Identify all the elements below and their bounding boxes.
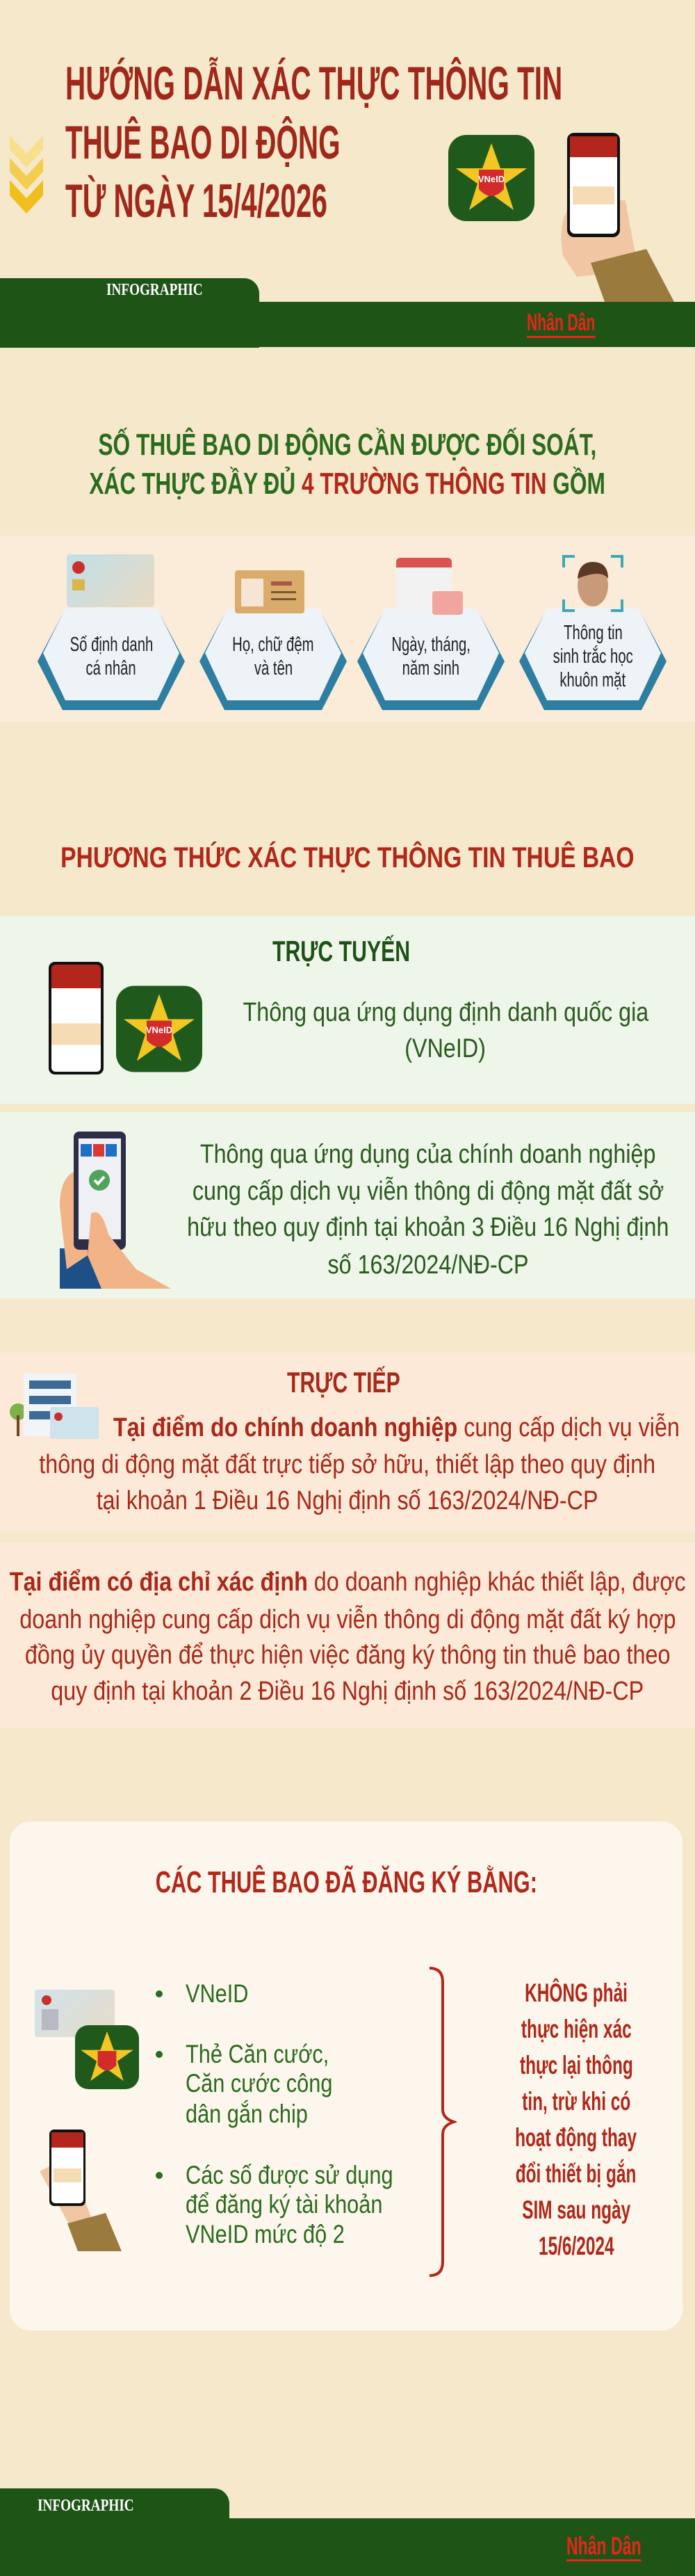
field 4: Thông tin xyxy=(564,622,622,644)
text: no re-verification: KHÔNG phải xyxy=(525,1979,628,2007)
text: own points: tại khoản 1 Điều 16 Nghị định số 163/2024/NĐ-CP xyxy=(97,1486,598,1515)
heading: TRỰC TUYẾN: TRỰC TUYẾN xyxy=(272,935,410,967)
text: operator app: Thông qua ứng dụng của chính doanh nghiệp xyxy=(200,1140,656,1169)
icon: VNeID app xyxy=(448,135,534,221)
panel: online VNeID xyxy=(0,916,695,1104)
list: registration methods: dân gắn chip xyxy=(186,2100,308,2128)
title: HƯỚNG DẪN XÁC THỰC THÔNG TIN xyxy=(65,57,562,110)
heading: 4 fields: XÁC THỰC ĐẦY ĐỦ 4 TRƯỜNG THÔNG TIN GỒM xyxy=(90,467,605,501)
list: registration methods: Thẻ Căn cước, xyxy=(186,2040,329,2068)
field 3: năm sinh xyxy=(402,657,459,679)
text: authorized points xyxy=(10,1568,685,1706)
icon: face scan xyxy=(562,555,623,612)
text: authorized points: đồng ủy quyền để thực hiện việc đăng ký thông tin thuê bao theo xyxy=(25,1641,670,1670)
text: operator app xyxy=(187,1140,669,1280)
icon: VNeID app small xyxy=(75,2025,139,2089)
icon: building with ID card xyxy=(10,1374,99,1439)
icon: VNeID app: VNeID xyxy=(146,1025,172,1035)
field 2: và tên xyxy=(254,657,293,679)
text: no re-verification: thực lại thông xyxy=(520,2051,632,2079)
text: own points: Tại điểm do chính doanh nghiệp cung cấp dịch vụ viễn xyxy=(113,1413,680,1442)
icon: name badge xyxy=(235,570,304,613)
text: authorized points: Tại điểm có địa chỉ xác định do doanh nghiệp khác thiết lập, được xyxy=(10,1568,685,1597)
text: no re-verification: tin, trừ khi có xyxy=(522,2087,630,2116)
field 1: Số định danh xyxy=(70,634,153,656)
text: VNeID xyxy=(243,998,649,1063)
label: INFOGRAPHIC: INFOGRAPHIC xyxy=(106,281,203,299)
chevrons decoration xyxy=(10,136,43,214)
icon: VNeID app: VNeID xyxy=(478,174,505,184)
text: no re-verification xyxy=(515,1978,637,2260)
list: registration methods xyxy=(156,1979,393,2248)
text: authorized points: doanh nghiệp cung cấp dịch vụ viễn thông di động mặt đất ký hợp xyxy=(19,1605,676,1634)
panel: 4 fields band xyxy=(0,536,695,722)
header xyxy=(0,57,695,348)
icon: hand with phone small xyxy=(40,2130,122,2251)
field 4: sinh trắc học xyxy=(553,645,633,668)
field 4 xyxy=(519,555,667,710)
text: own points xyxy=(39,1413,680,1515)
panel: registered subscribers xyxy=(10,1821,682,2331)
panel: direct authorized points xyxy=(0,1543,695,1728)
icon: phone xyxy=(49,962,104,1074)
field 1 xyxy=(38,554,185,710)
list: registration methods: Căn cước công xyxy=(186,2069,332,2098)
field 3: Ngày, tháng, xyxy=(391,634,471,656)
text: VNeID: (VNeID) xyxy=(405,1034,486,1063)
list: registration methods: VNeID xyxy=(186,1979,248,2008)
panel: direct own points xyxy=(0,1353,695,1531)
text: no re-verification: SIM sau ngày xyxy=(522,2196,630,2224)
icon: VNeID app xyxy=(116,986,202,1072)
list: registration methods: VNeID mức độ 2 xyxy=(186,2220,345,2248)
heading: 4 fields: SỐ THUÊ BAO DI ĐỘNG CẦN ĐƯỢC ĐỐI SOÁT, xyxy=(99,428,596,462)
field 1: cá nhân xyxy=(86,657,136,679)
text: no re-verification: thực hiện xác xyxy=(521,2015,631,2043)
icon: ID card xyxy=(67,554,154,607)
icon: calendar cake xyxy=(396,558,452,613)
list: registration methods: Các số được sử dụng xyxy=(186,2161,393,2189)
text: operator app: số 163/2024/NĐ-CP xyxy=(327,1250,529,1280)
band: top green xyxy=(0,278,259,348)
field 3 xyxy=(357,558,505,710)
text: own points: thông di động mặt đất trực tiếp sở hữu, thiết lập theo quy định xyxy=(40,1450,655,1479)
text: no re-verification: 15/6/2024 xyxy=(539,2232,614,2260)
footer xyxy=(0,2488,695,2576)
text: authorized points: quy định tại khoản 2 Điều 16 Nghị định số 163/2024/NĐ-CP xyxy=(51,1677,644,1706)
icon: hand with phone xyxy=(60,1132,171,1289)
field 2: Họ, chữ đệm xyxy=(232,634,314,656)
logo: Nhân Dân: Nhân Dân xyxy=(527,309,595,336)
text: operator app: cung cấp dịch vụ viễn thông di động mặt đất sở xyxy=(193,1177,664,1206)
text: no re-verification: hoạt động thay xyxy=(515,2123,637,2152)
title xyxy=(65,57,562,227)
text: VNeID: Thông qua ứng dụng định danh quốc gia xyxy=(243,998,648,1027)
heading: methods: PHƯƠNG THỨC XÁC THỰC THÔNG TIN THUÊ BAO xyxy=(60,841,635,874)
heading: TRỰC TIẾP: TRỰC TIẾP xyxy=(287,1366,400,1399)
heading: 4 fields xyxy=(89,427,605,501)
icon: ID card xyxy=(35,1990,115,2037)
icon: hand holding phone xyxy=(562,133,674,302)
title: TỪ NGÀY 15/4/2026 xyxy=(65,175,327,227)
brace xyxy=(430,1967,457,2277)
field 2 xyxy=(199,570,347,710)
text: no re-verification: đổi thiết bị gắn xyxy=(516,2159,637,2188)
panel: online operator app xyxy=(0,1112,695,1298)
list: registration methods: để đăng ký tài khoản xyxy=(186,2190,382,2219)
text: operator app: hữu theo quy định tại khoản 3 Điều 16 Nghị định xyxy=(187,1213,669,1242)
logo: Nhân Dân footer: Nhân Dân xyxy=(566,2531,641,2560)
field 4: khuôn mặt xyxy=(560,669,626,691)
heading: registered: CÁC THUÊ BAO ĐÃ ĐĂNG KÝ BẰNG: xyxy=(155,1865,537,1899)
title: THUÊ BAO DI ĐỘNG xyxy=(65,116,341,169)
label: INFOGRAPHIC footer: INFOGRAPHIC xyxy=(38,2497,134,2515)
